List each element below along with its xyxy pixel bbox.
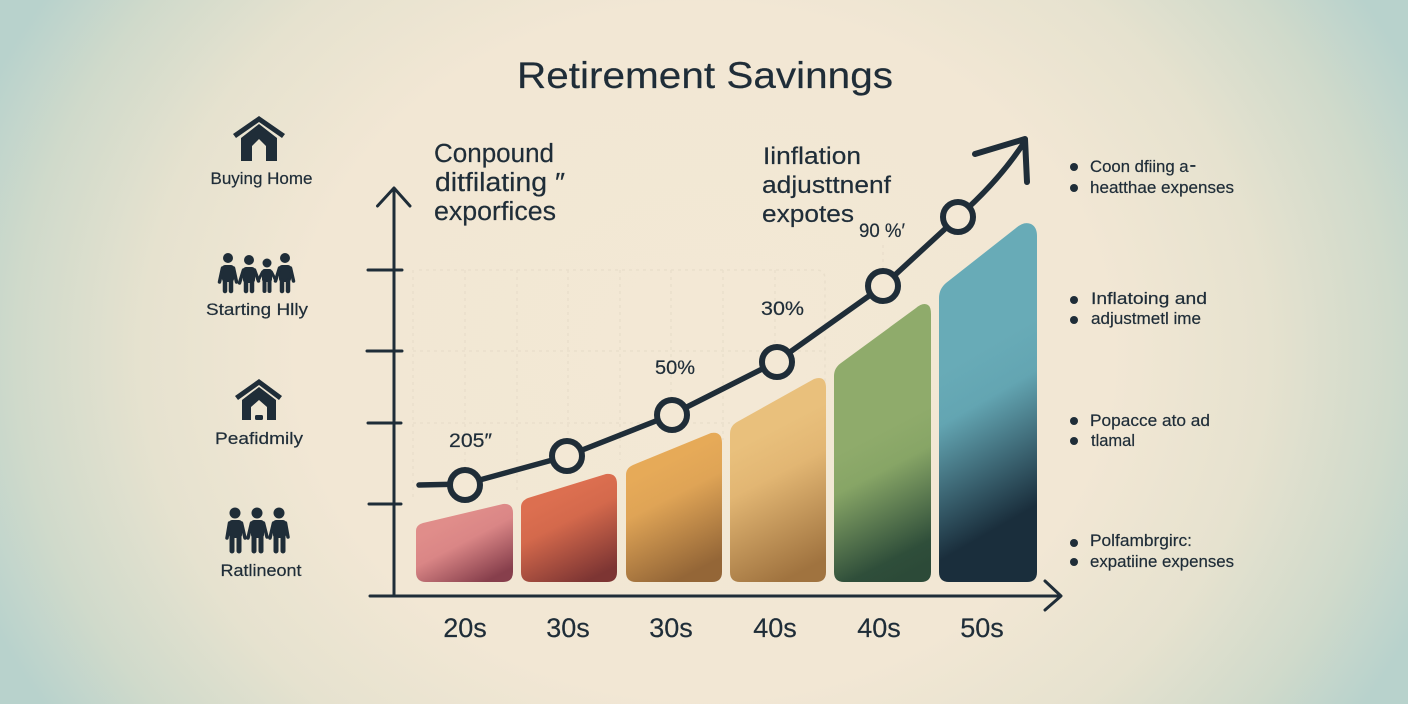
note 1: Coon dfiing a⁃ [1090,158,1197,176]
annotation: inflation: adjusttnenf [762,172,891,199]
growth line with arrow [419,139,1027,485]
annotation: compound: ditfilating ″ [435,169,565,197]
note 4: expatiine expenses [1090,553,1234,571]
x axis labels: 30s [649,613,693,643]
label: retirement: Ratlineont [220,562,302,580]
bar: 40s [730,378,826,582]
note 4: Polfambrgirc: [1090,532,1192,550]
data labels [449,221,905,452]
background grid [413,245,883,500]
annotation: compound: exporfices [434,198,556,226]
data points [450,202,973,500]
label: buying home: Buying Home [210,170,312,188]
note 3: Popacce ato ad [1090,412,1210,430]
note 1: heatthae expenses [1090,179,1234,197]
data labels: 50% [655,358,695,379]
note 3: tlamal [1091,432,1135,450]
bar: 30s second [626,433,722,582]
data labels: 30% [761,299,804,320]
label: starting family: Starting Hlly [206,301,309,319]
annotation: inflation: Iinflation [763,143,861,170]
icon: starting family [220,253,294,291]
title: Retirement Savinngs [517,54,893,96]
note 3 [1070,412,1210,450]
x axis labels: 20s [443,613,487,643]
data labels: 90 %′ [859,221,905,242]
bar: 30s [521,474,617,582]
bar: 40s second [834,304,931,582]
x axis labels [443,613,1004,643]
note 4 [1070,532,1234,571]
note 2: adjustmetl ime [1091,310,1201,328]
bar: 50s [939,223,1037,582]
icon: buying home [233,116,285,161]
icon: retirement people [227,508,288,551]
x axis labels: 30s [546,613,590,643]
annotation: compound [434,140,565,226]
axes [367,188,1061,610]
x axis labels: 40s [753,613,797,643]
panel: expense notes [1070,158,1234,571]
chart: savings by age [367,139,1061,643]
bar: 20s [416,504,513,582]
note 1 [1070,158,1234,197]
annotation: inflation [762,143,891,228]
icon: family home [235,379,282,420]
panel: life stages [206,116,312,580]
x axis labels: 50s [960,613,1004,643]
data labels: 205″ [449,431,492,452]
note 2 [1070,290,1207,328]
annotation: compound: Conpound [434,140,554,168]
x axis labels: 40s [857,613,901,643]
label: family: Peafidmily [215,430,304,448]
note 2: Inflatoing and [1091,290,1207,308]
annotation: inflation: expotes [762,201,854,228]
